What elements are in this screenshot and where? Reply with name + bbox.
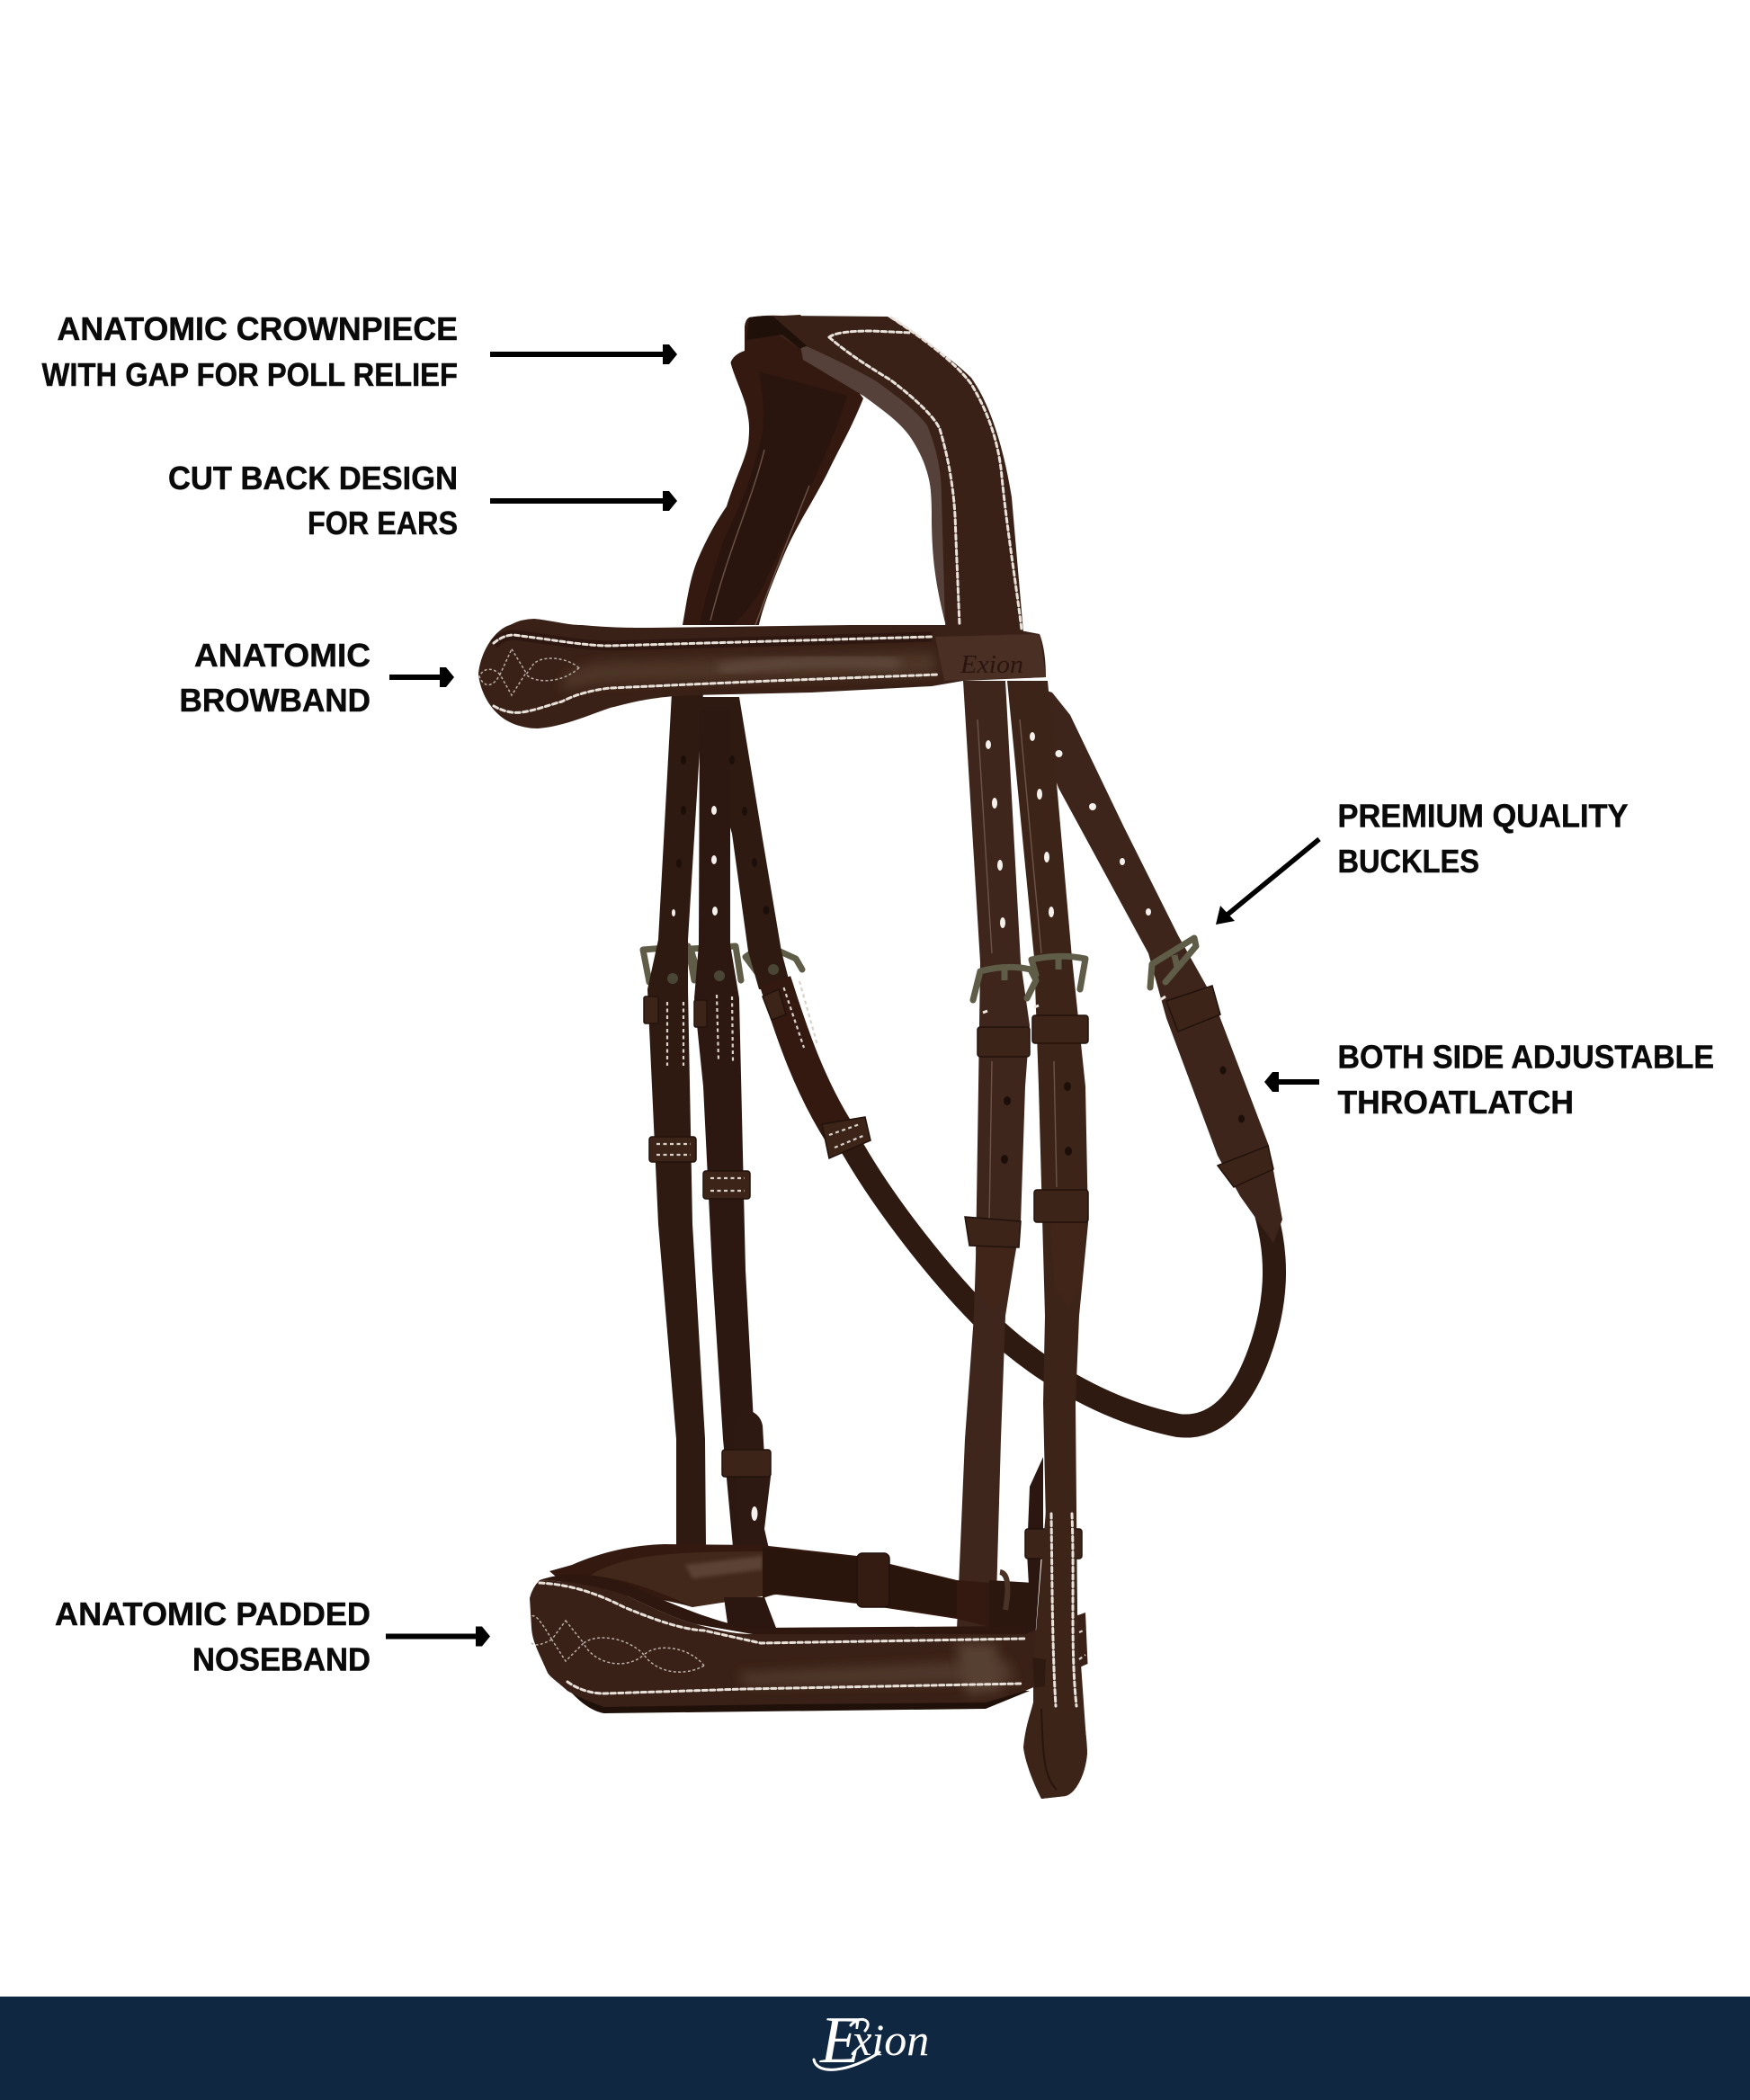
- label: premium quality buckles: BUCKLES: [1338, 843, 1479, 880]
- right strap holes: [986, 732, 1245, 1164]
- arrow: noseband: [386, 1626, 490, 1646]
- left cheek straps: [647, 693, 776, 1628]
- label: anatomic browband: [180, 637, 371, 719]
- label: anatomic browband: BROWBAND: [180, 682, 371, 719]
- footer logo: E: [819, 2004, 861, 2078]
- label: cut back design: CUT BACK DESIGN: [168, 460, 458, 496]
- label: both side adjustable throatlatch: THROATLATCH: [1338, 1084, 1574, 1121]
- label: anatomic padded noseband: ANATOMIC PADDED: [55, 1595, 371, 1632]
- buckles behind straps: [643, 944, 802, 982]
- anatomic browband: [478, 619, 1046, 728]
- bridle illustration: [478, 315, 1282, 1799]
- label: anatomic padded noseband: NOSEBAND: [192, 1640, 371, 1678]
- right keepers and buckles: [965, 938, 1273, 1559]
- anatomic browband: Exion: [960, 651, 1023, 679]
- arrow: crownpiece: [490, 344, 677, 364]
- left strap keepers: [644, 964, 871, 1477]
- throatlatch strap: [692, 688, 1282, 1426]
- label: anatomic padded noseband: [55, 1595, 371, 1678]
- noseband front strap loop: [1023, 1511, 1087, 1799]
- right cheek straps: [957, 681, 1088, 1799]
- label: cut back design: [168, 460, 458, 541]
- anatomic padded noseband: [530, 1544, 1088, 1713]
- label: premium quality buckles: [1338, 797, 1628, 880]
- anatomic crownpiece: [683, 315, 1023, 632]
- left strap holes: [672, 755, 770, 916]
- arrow: throatlatch: [1264, 1072, 1319, 1092]
- label: both side adjustable throatlatch: [1338, 1038, 1714, 1121]
- label: anatomic crownpiece: ANATOMIC CROWNPIECE: [58, 310, 458, 347]
- label: both side adjustable throatlatch: BOTH SIDE ADJUSTABLE: [1338, 1038, 1714, 1076]
- label: premium quality buckles: PREMIUM QUALITY: [1338, 797, 1628, 835]
- label: anatomic crownpiece: [41, 310, 458, 393]
- arrow: cut back design: [490, 491, 677, 511]
- arrow: buckles: [1216, 839, 1319, 925]
- label: anatomic browband: ANATOMIC: [194, 637, 371, 674]
- arrow: browband: [389, 667, 454, 687]
- footer band: [0, 1997, 1750, 2100]
- label: cut back design: FOR EARS: [308, 505, 458, 541]
- label: anatomic crownpiece: WITH GAP FOR POLL RELIEF: [41, 356, 458, 393]
- footer logo: xion: [851, 2015, 929, 2065]
